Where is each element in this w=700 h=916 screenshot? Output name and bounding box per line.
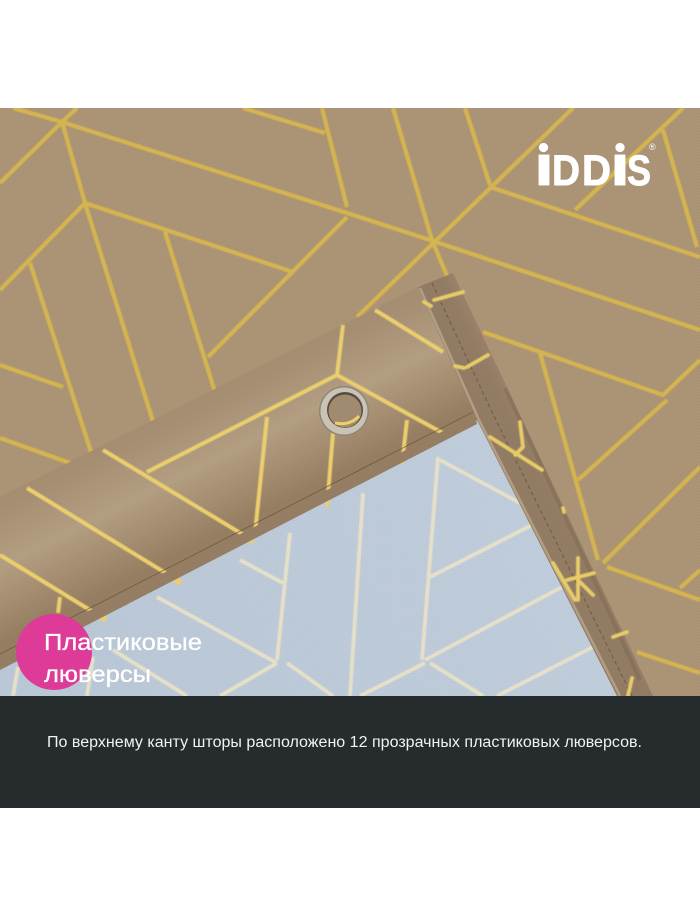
flap yellow pattern xyxy=(0,310,450,620)
right side hem strip xyxy=(418,273,653,696)
logo: iddis: D xyxy=(582,147,611,195)
pink circle accent xyxy=(16,614,92,690)
caption text: По верхнему канту шторы расположено 12 прозрачных пластиковых люверсов. xyxy=(47,734,642,751)
heading: plastic grommets xyxy=(44,629,202,687)
lining cream pattern xyxy=(13,457,593,696)
icon: plastic grommet xyxy=(319,386,369,436)
back fabric gold geometric pattern xyxy=(0,108,700,673)
fabric twill texture xyxy=(0,108,700,696)
blue curtain lining xyxy=(0,420,620,696)
hem stitch line xyxy=(0,412,473,654)
hem yellow pattern fragments xyxy=(424,292,632,696)
flap bottom hem band xyxy=(0,415,477,670)
logo: iddis: D xyxy=(552,147,580,195)
logo: iddis xyxy=(539,142,656,195)
heading: plastic grommets: Пластиковые xyxy=(44,629,202,655)
logo: iddis: ® xyxy=(649,142,656,152)
hem edge fold and stitching xyxy=(420,283,640,696)
photo: curtain fabric xyxy=(0,108,700,696)
logo: iddis: S xyxy=(627,147,651,195)
heading: plastic grommets: люверсы xyxy=(44,661,151,687)
caption band xyxy=(0,696,700,808)
folded top flap xyxy=(0,287,477,664)
back fabric background xyxy=(0,108,700,696)
infographic canvas xyxy=(0,108,700,808)
